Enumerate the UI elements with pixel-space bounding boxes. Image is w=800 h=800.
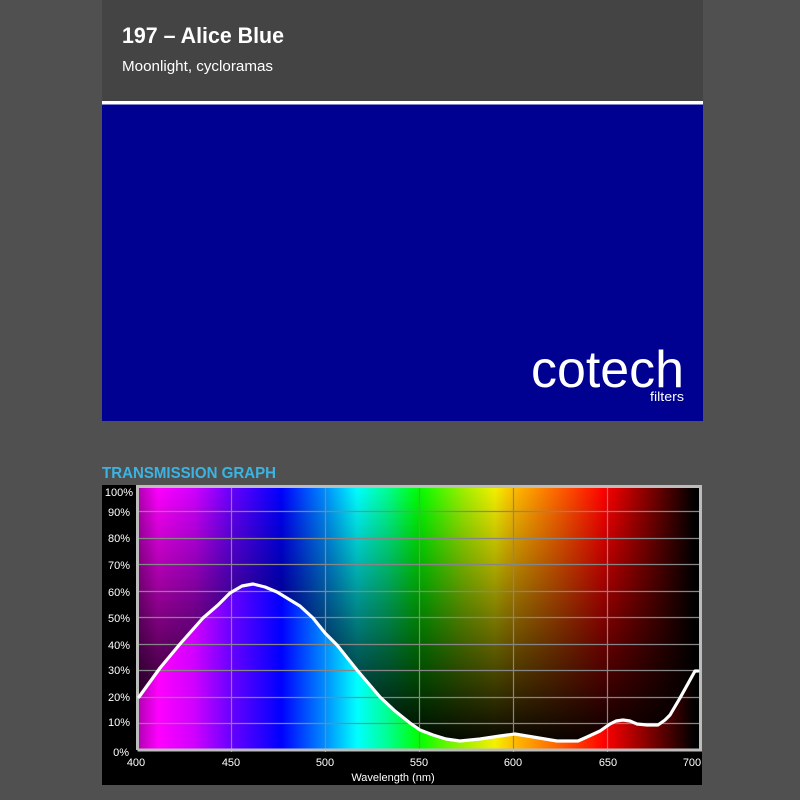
colour swatch panel: [102, 101, 703, 421]
x axis labels: 650: [599, 757, 617, 769]
y axis labels: 40%: [108, 640, 130, 652]
y axis labels: 0%: [113, 747, 129, 759]
transmission curve: [139, 584, 698, 741]
transmission chart: [102, 485, 702, 785]
x axis labels: [127, 757, 701, 769]
spectrum under curve: [138, 584, 700, 750]
y axis labels: 80%: [108, 533, 130, 545]
y axis labels: 90%: [108, 507, 130, 519]
subtitle: Moonlight, cycloramas: [122, 59, 273, 75]
y axis labels: 100%: [105, 487, 133, 499]
y axis labels: 30%: [108, 665, 130, 677]
x axis labels: 600: [504, 757, 522, 769]
logo: cotech filters: cotech: [531, 341, 684, 399]
y axis labels: [105, 487, 133, 759]
spectrum plot background: [138, 487, 700, 750]
x axis labels: 450: [222, 757, 240, 769]
x axis labels: 400: [127, 757, 145, 769]
y axis labels: 10%: [108, 717, 130, 729]
y axis labels: 60%: [108, 587, 130, 599]
plot frame: [138, 486, 700, 750]
grid lines: [136, 485, 700, 752]
graph heading: TRANSMISSION GRAPH: [102, 465, 276, 482]
x axis labels: 550: [410, 757, 428, 769]
x axis labels: 700: [683, 757, 701, 769]
x axis title: Wavelength (nm): [351, 772, 435, 784]
y axis labels: 50%: [108, 613, 130, 625]
y axis labels: 20%: [108, 692, 130, 704]
header panel: [102, 0, 703, 101]
x axis labels: 500: [316, 757, 334, 769]
y axis labels: 70%: [108, 560, 130, 572]
logo: cotech filters: filters: [650, 389, 685, 404]
title: 197 – Alice Blue: [122, 23, 284, 48]
